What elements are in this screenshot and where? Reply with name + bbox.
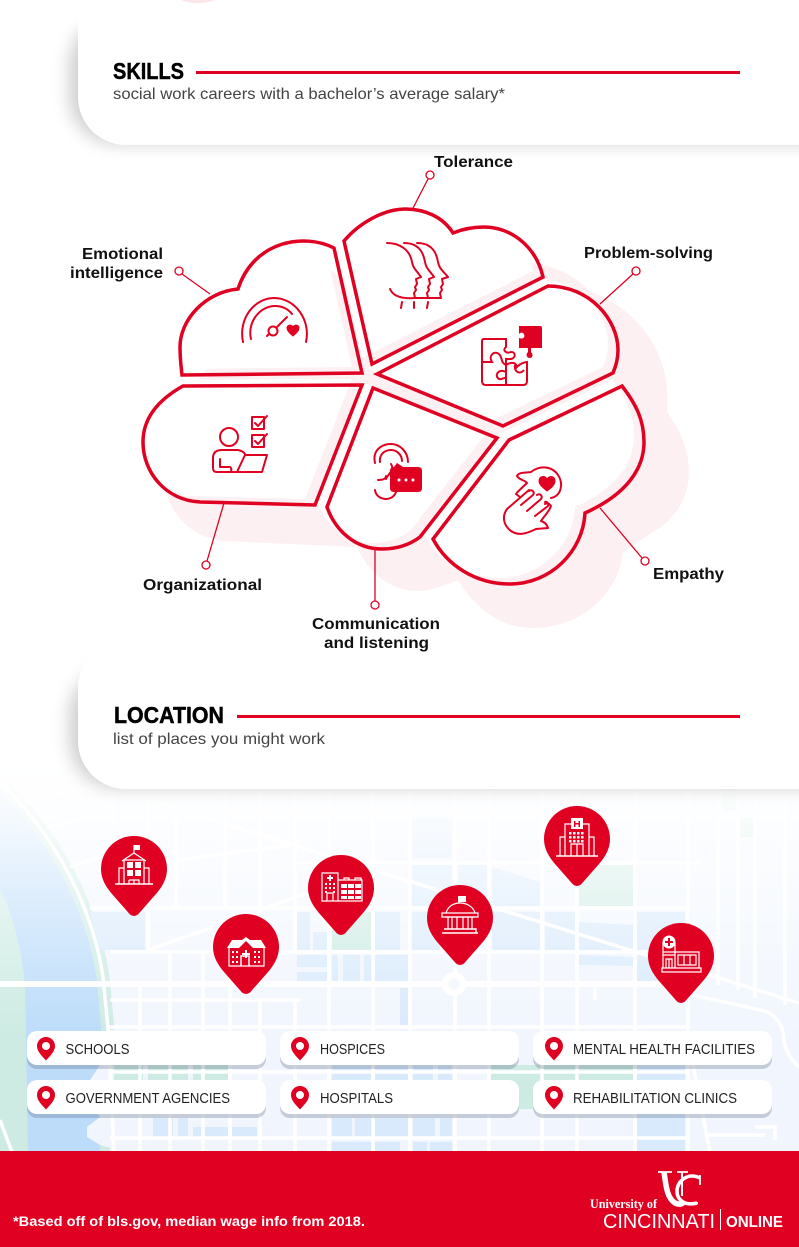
icon: ear with speech bubble (374, 444, 422, 499)
leader line: tolerance (412, 171, 434, 210)
legend item: hospices (280, 1031, 519, 1069)
logo: University of Cincinnati Online: ONLINE (726, 1214, 783, 1231)
green river banks (0, 783, 756, 1152)
label: emotional intelligence (70, 246, 163, 282)
legend item: government agencies: GOVERNMENT AGENCIES (66, 1091, 230, 1107)
legend item: government agencies (27, 1080, 266, 1118)
logo: University of Cincinnati Online (590, 1172, 783, 1233)
leader line: empathy (600, 508, 649, 565)
main river road (0, 783, 108, 1028)
leader line: emotional intelligence (175, 267, 210, 294)
top decorative arc (174, 0, 222, 3)
map pin: government agency (427, 885, 493, 965)
chart: skills cloud diagram (70, 154, 724, 652)
legend item: hospitals: HOSPITALS (320, 1091, 393, 1107)
footer band (0, 1151, 799, 1247)
heading: location: LOCATION (114, 702, 224, 728)
pink cloud shadow (159, 263, 689, 628)
map background (0, 760, 799, 1152)
legend list (27, 1031, 772, 1118)
location subtitle: list of places you might work (113, 731, 326, 748)
map pin: mental health facility (544, 806, 610, 886)
legend item: mental health facilities (533, 1031, 772, 1069)
label: communication and listening: Communication (312, 616, 440, 633)
footnote: *Based off of bls.gov, median wage info from 2018. (13, 1213, 365, 1229)
label: emotional intelligence: Emotional (82, 246, 163, 263)
cloud segment: problem-solving (377, 286, 618, 426)
legend item: hospitals (280, 1080, 519, 1118)
location heading rule (237, 715, 740, 718)
roads (0, 780, 799, 1152)
legend item: schools (27, 1031, 266, 1069)
panel: location header card (70, 640, 799, 789)
legend item: schools: SCHOOLS (66, 1042, 130, 1058)
legend item: mental health facilities: MENTAL HEALTH FACILITIES (573, 1042, 755, 1058)
map fade overlay (0, 755, 799, 1045)
skills subtitle: social work careers with a bachelor’s average salary* (113, 86, 505, 103)
cloud segment: emotional intelligence (180, 241, 362, 375)
label: communication and listening: and listening (324, 635, 429, 652)
map pin: rehabilitation clinic (648, 923, 714, 1003)
white cloud fills (133, 203, 634, 578)
legend item: rehabilitation clinics: REHABILITATION CLINICS (573, 1091, 737, 1107)
icon: gauge with heart (242, 298, 307, 342)
city blocks (90, 818, 685, 1152)
icon: hands holding heart (504, 467, 561, 534)
label: problem-solving: Problem-solving (584, 245, 713, 262)
leader line: communication (371, 550, 379, 609)
icon: person at laptop with checklist (213, 416, 267, 472)
heading: skills: SKILLS (113, 58, 184, 84)
logo monogram (658, 1172, 700, 1204)
map pin: school (101, 836, 167, 916)
label: organizational: Organizational (143, 577, 262, 594)
icon: puzzle pieces (482, 326, 542, 385)
legend item: hospices: HOSPICES (320, 1042, 385, 1058)
label: communication and listening (312, 616, 440, 652)
label: empathy: Empathy (653, 566, 724, 583)
cloud segment: communication and listening (327, 388, 497, 549)
cloud segment: organizational (143, 385, 362, 505)
panel: skills header card (70, 0, 799, 145)
river (0, 783, 108, 1152)
label: emotional intelligence: intelligence (70, 265, 163, 282)
leader line: organizational (202, 503, 224, 569)
legend item: rehabilitation clinics (533, 1080, 772, 1118)
leader line: problem-solving (600, 267, 640, 304)
skills heading rule (196, 71, 740, 74)
cloud segment: empathy (433, 386, 644, 584)
map pin: hospital (213, 914, 279, 994)
label: tolerance: Tolerance (434, 154, 513, 171)
logo: University of Cincinnati Online: University of (590, 1197, 658, 1211)
map pin: hospice (308, 855, 374, 935)
cloud segment: tolerance (344, 209, 543, 364)
logo: University of Cincinnati Online: CINCINNATI (603, 1211, 715, 1233)
icon: three head profiles (387, 243, 448, 308)
